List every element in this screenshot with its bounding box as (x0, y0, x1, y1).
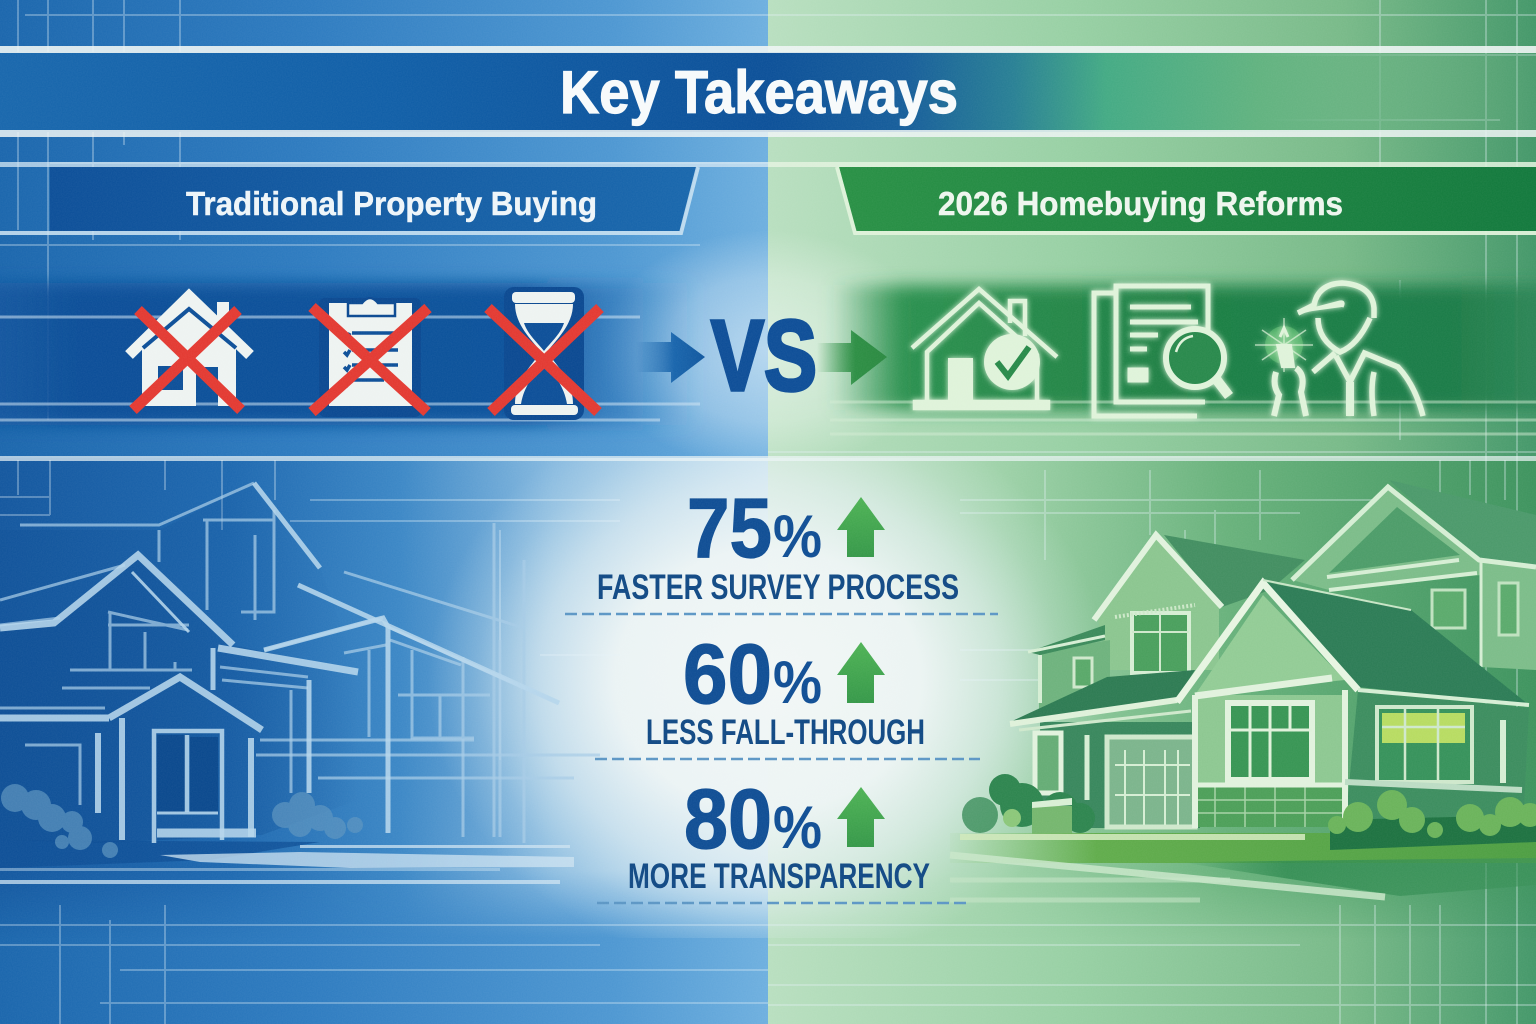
arrow up (837, 497, 885, 557)
stat: 80% more transparency: % (773, 794, 822, 861)
arrow: out of VS (817, 330, 887, 385)
heading: Key Takeaways: Key Takeaways (560, 59, 958, 126)
stat: 75% faster survey process: 75 (687, 481, 772, 575)
title banner (0, 46, 1536, 137)
lawn and path (950, 833, 1536, 900)
icon: approved house (912, 289, 1057, 408)
icon: document with magnifier (1094, 286, 1229, 416)
main gable and roof (1177, 580, 1529, 830)
stat: 75% faster survey process (565, 481, 998, 614)
arrow up (837, 787, 885, 847)
stat: 60% less fall-through: LESS FALL-THROUGH (646, 713, 925, 752)
arrow up (837, 642, 885, 703)
stat: 80% more transparency: 80 (684, 772, 772, 866)
heading: left side: Traditional Property Buying (186, 185, 597, 222)
back house (1292, 480, 1536, 670)
icon: crossed-out house (129, 296, 250, 410)
heading: right side: 2026 Homebuying Reforms (938, 185, 1343, 222)
stat: 80% more transparency: MORE TRANSPARENCY (628, 857, 930, 896)
illustration: blueprint house (0, 483, 600, 884)
icon band: reforms (830, 285, 1536, 434)
label: VS: VS (711, 300, 817, 412)
banner: 2026 Homebuying Reforms (768, 162, 1536, 233)
icon: crossed-out clipboard (312, 298, 428, 417)
shrubs: right of porch (272, 792, 363, 839)
upper roof and gable (1094, 535, 1305, 673)
stat: 60% less fall-through: 60 (683, 627, 772, 721)
shrubs: left of porch (1, 784, 118, 858)
stat: 75% faster survey process: FASTER SURVEY PROCESS (597, 568, 959, 607)
left wing (1028, 625, 1110, 710)
divider above stats (0, 456, 1536, 461)
shrubs: right of house (1328, 790, 1536, 850)
porch (1010, 670, 1200, 828)
banner: Traditional Property Buying (0, 162, 768, 233)
stat: 75% faster survey process: % (773, 503, 822, 570)
icon: crossed-out hourglass (488, 287, 600, 420)
stat: 60% less fall-through (595, 627, 980, 759)
icon: inspector with flashlight (1255, 283, 1423, 416)
arrow: into VS (636, 332, 705, 383)
icon band: traditional (0, 283, 700, 425)
shrubs: left of entrance (962, 774, 1095, 833)
illustration: finished green house (950, 480, 1536, 900)
stat: 60% less fall-through: % (773, 649, 822, 716)
planter (1032, 798, 1072, 834)
stat: 80% more transparency (597, 772, 967, 903)
